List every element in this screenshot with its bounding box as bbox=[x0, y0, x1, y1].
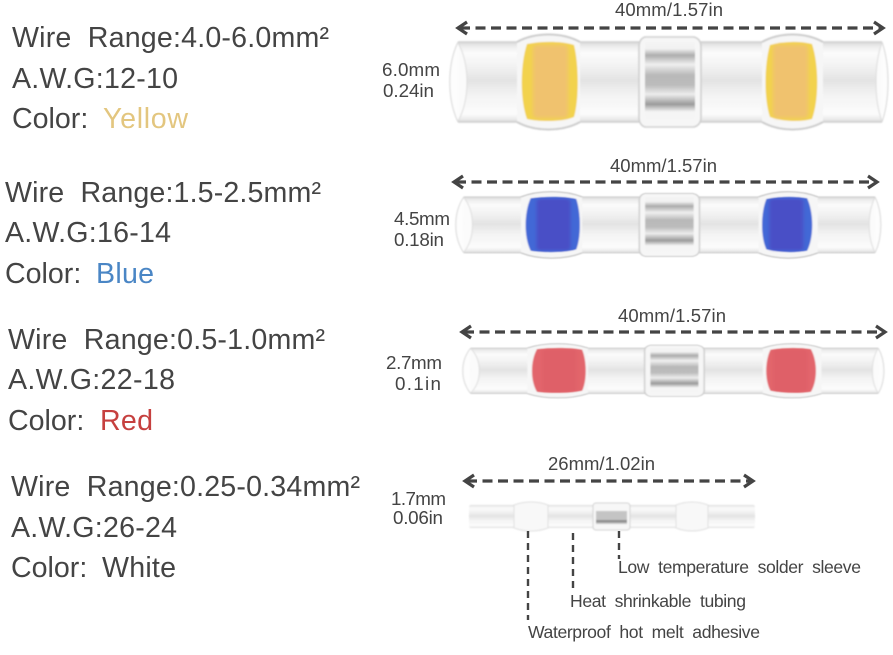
diameter label: red connector: 0.1in bbox=[395, 373, 441, 394]
spec block: red: Wire Range:0.5-1.0mm² bbox=[8, 324, 325, 356]
spec block: yellow: Yellow bbox=[103, 103, 188, 135]
connector: yellow bbox=[450, 34, 888, 130]
diameter label: blue connector: 0.18in bbox=[394, 229, 444, 250]
leader line: tubing bbox=[572, 533, 574, 589]
connector: blue bbox=[456, 192, 881, 258]
spec block: yellow: Color: bbox=[12, 103, 88, 135]
spec block: red bbox=[8, 324, 325, 437]
spec block: blue: Wire Range:1.5-2.5mm² bbox=[5, 177, 321, 209]
length label: red connector: 40mm/1.57in bbox=[618, 305, 726, 326]
label: tubing: Heat shrinkable tubing bbox=[570, 591, 746, 611]
spec block: red: Color: bbox=[8, 405, 84, 437]
spec block: blue: Color: bbox=[5, 258, 81, 290]
dimension arrow: yellow connector bbox=[458, 22, 883, 34]
diameter label: yellow connector: 0.24in bbox=[383, 80, 434, 101]
spec block: yellow bbox=[12, 22, 329, 135]
leader line: solder sleeve bbox=[618, 531, 620, 559]
spec block: white: White bbox=[102, 552, 176, 584]
diameter label: red connector bbox=[386, 352, 442, 394]
diameter label: blue connector bbox=[394, 208, 450, 250]
spec block: blue bbox=[5, 177, 321, 290]
dimension arrow: red connector bbox=[462, 326, 885, 338]
diameter label: white connector bbox=[391, 488, 446, 528]
diameter label: white connector: 1.7mm bbox=[391, 488, 446, 509]
diameter label: blue connector: 4.5mm bbox=[394, 208, 450, 229]
label: adhesive: Waterproof hot melt adhesive bbox=[528, 622, 760, 642]
spec block: white: Wire Range:0.25-0.34mm² bbox=[11, 471, 360, 503]
dimension arrow: white connector bbox=[465, 475, 753, 487]
label: solder sleeve: Low temperature solder sleeve bbox=[618, 557, 861, 577]
diameter label: yellow connector: 6.0mm bbox=[382, 59, 440, 80]
length label: white connector: 26mm/1.02in bbox=[548, 453, 655, 474]
length label: blue connector: 40mm/1.57in bbox=[610, 155, 717, 176]
spec block: blue: Blue bbox=[96, 258, 154, 290]
spec block: white bbox=[11, 471, 360, 584]
spec block: red: Red bbox=[100, 405, 153, 437]
spec block: white: Color: bbox=[11, 552, 87, 584]
spec block: red: A.W.G:22-18 bbox=[8, 364, 175, 396]
spec block: yellow: Wire Range:4.0-6.0mm² bbox=[12, 22, 329, 54]
diameter label: yellow connector bbox=[382, 59, 440, 101]
leader line: adhesive bbox=[527, 531, 529, 620]
spec block: blue: A.W.G:16-14 bbox=[5, 217, 171, 249]
spec block: yellow: A.W.G:12-10 bbox=[12, 63, 178, 95]
connector: red bbox=[463, 344, 884, 398]
spec block: white: A.W.G:26-24 bbox=[11, 512, 177, 544]
dimension arrow: blue connector bbox=[454, 176, 877, 188]
diameter label: red connector: 2.7mm bbox=[386, 352, 442, 373]
connector: white bbox=[469, 502, 755, 531]
diameter label: white connector: 0.06in bbox=[393, 507, 443, 528]
